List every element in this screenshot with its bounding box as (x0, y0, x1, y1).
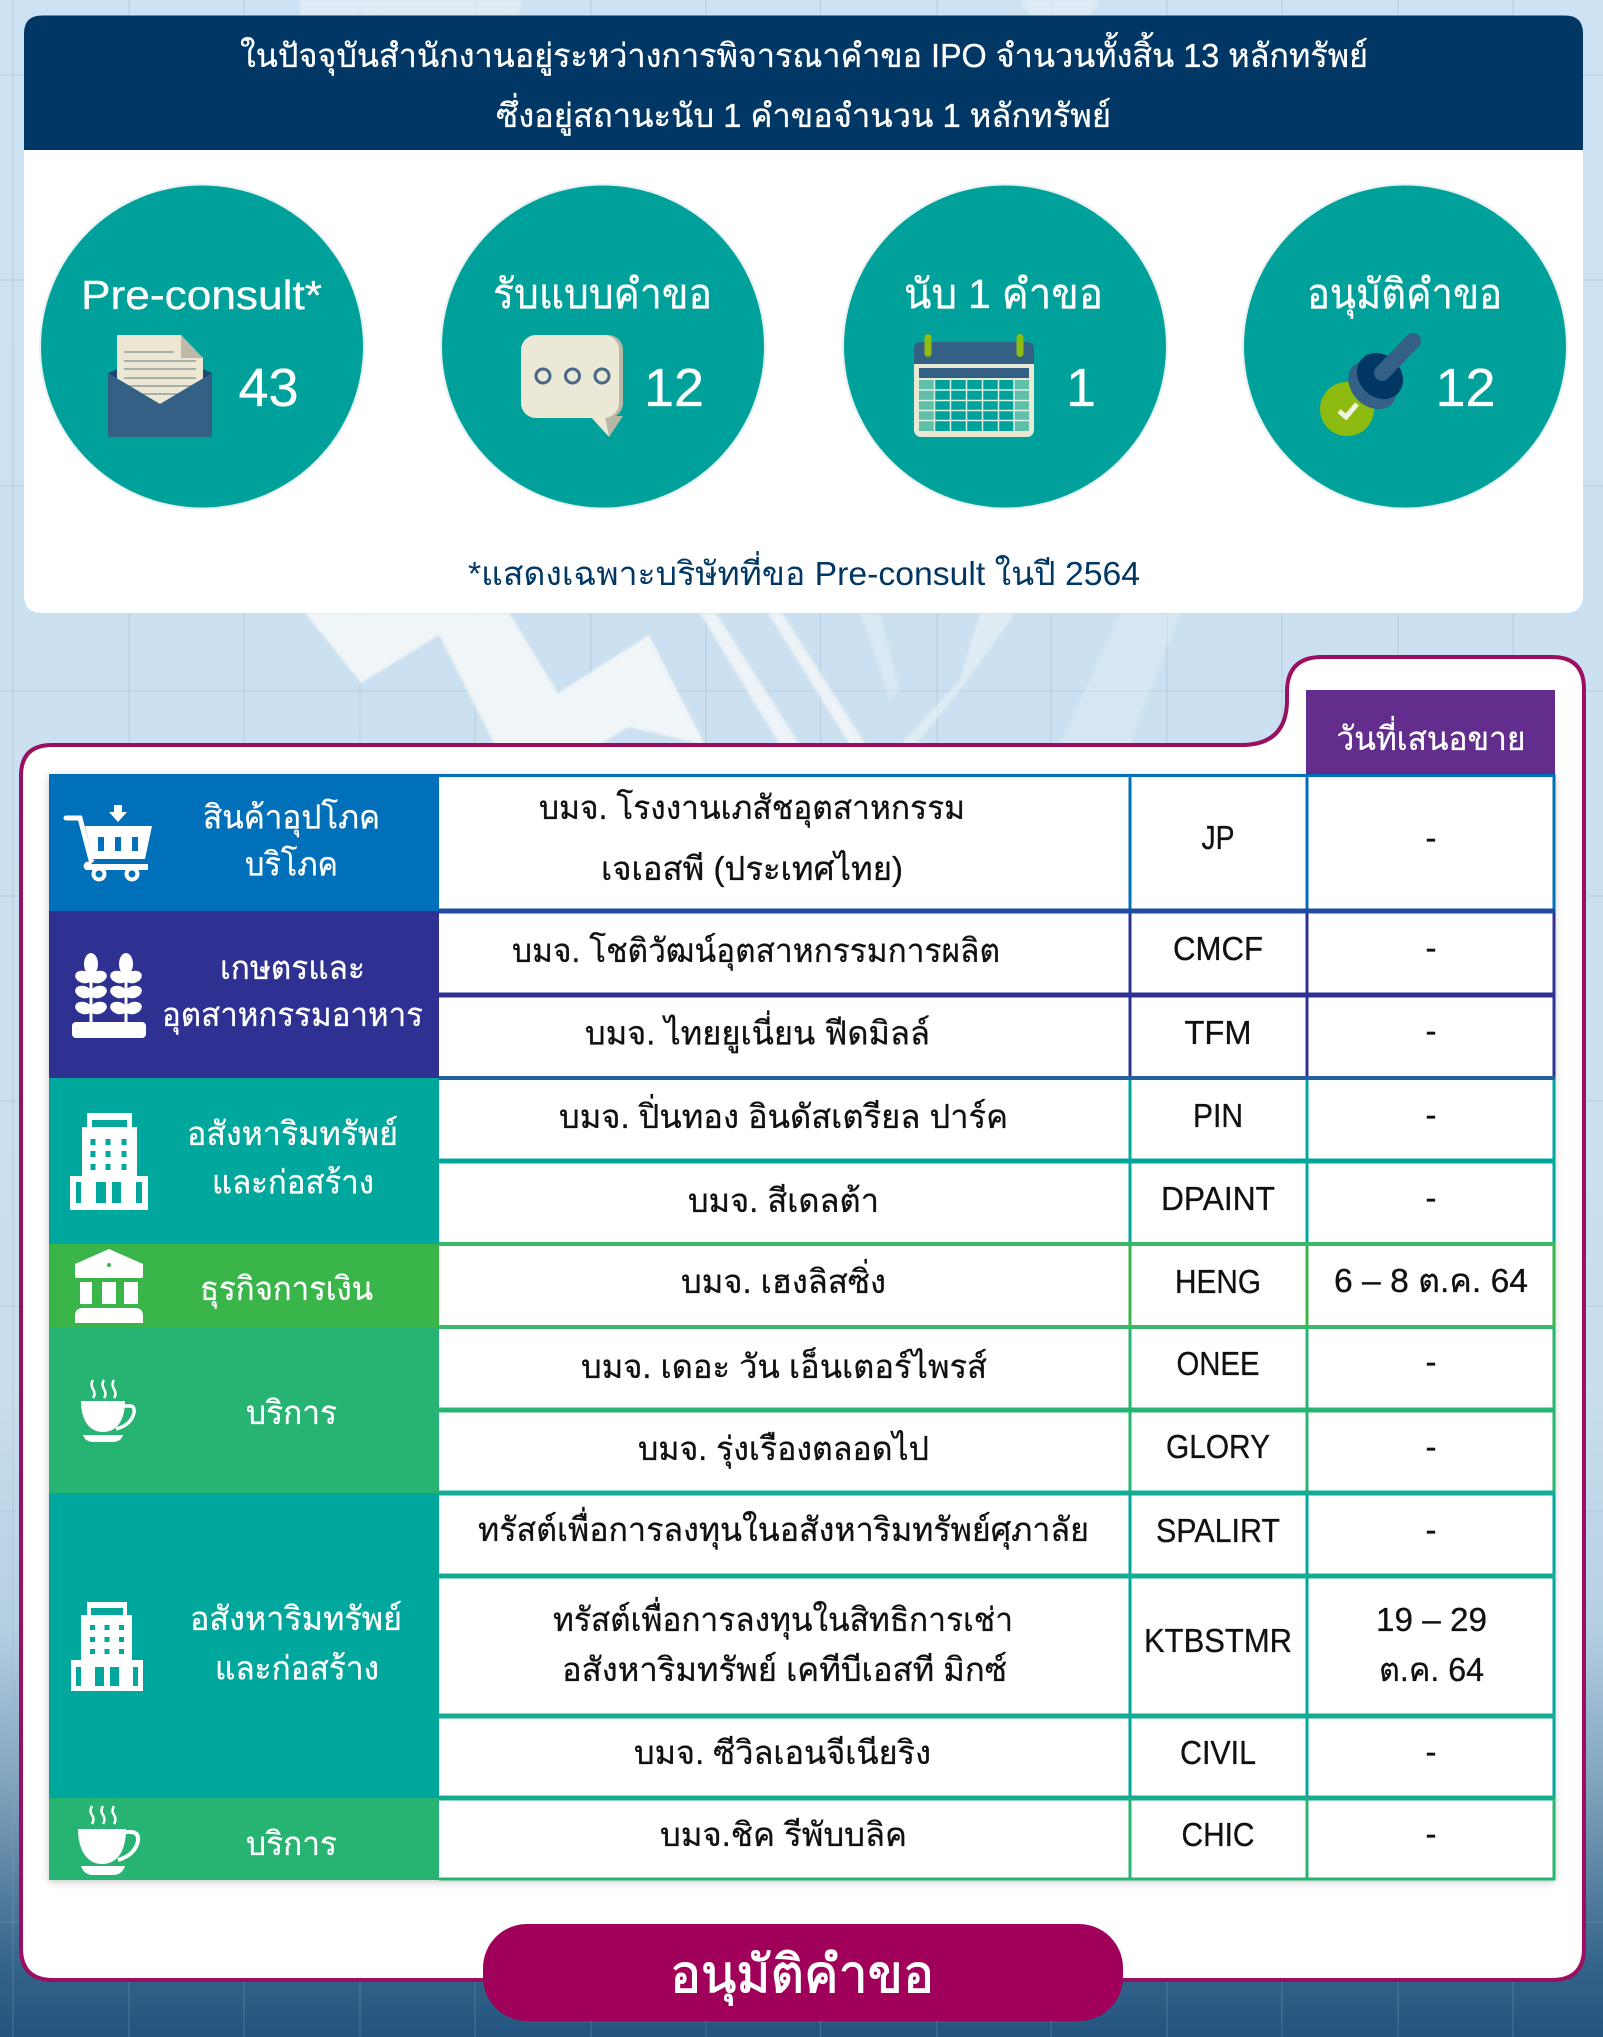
offer dates: - (1426, 819, 1436, 856)
category: services: บริการ (246, 1394, 337, 1431)
circle: Pre-consult: 43 (238, 358, 299, 418)
tickers: TFM (1184, 1014, 1252, 1051)
offer dates: - (1426, 1511, 1436, 1548)
offer dates: - (1426, 1428, 1436, 1465)
tickers: KTBSTMR (1144, 1622, 1292, 1659)
icon: shopping cart (66, 805, 152, 880)
footnote: *แสดงเฉพาะบริษัทที่ขอ Pre-consult ในปี 2564 (468, 551, 1140, 592)
category: property and construction: และก่อสร้าง (212, 1164, 374, 1200)
company names: ทรัสต์เพื่อการลงทุนในสิทธิการเช่า (553, 1597, 1013, 1640)
icon: coffee cup (78, 1806, 138, 1875)
offer dates: - (1426, 1179, 1436, 1216)
tickers (1144, 819, 1292, 1853)
tickers: CHIC (1182, 1816, 1254, 1853)
tickers: ONEE (1176, 1345, 1260, 1382)
offer dates: - (1426, 929, 1436, 966)
offer dates: - (1426, 1815, 1436, 1852)
icon: office building (71, 1602, 143, 1691)
category: property and construction (trusts): อสังหาริมทรัพย์ (190, 1600, 402, 1637)
circle: forms received (440, 184, 766, 510)
category: property and construction (49, 1078, 439, 1244)
tickers: GLORY (1166, 1428, 1270, 1465)
company names: บมจ. โชติวัฒน์อุตสาหกรรมการผลิต (512, 932, 1000, 971)
tickers: DPAINT (1161, 1180, 1275, 1217)
tickers: SPALIRT (1156, 1512, 1280, 1549)
company names: ทรัสต์เพื่อการลงทุนในอสังหาริมทรัพย์ศุภาลัย (478, 1507, 1089, 1550)
circle: Pre-consult: Pre-consult* (81, 272, 322, 318)
icon: bank (75, 1249, 143, 1323)
company names: บมจ. โรงงานเภสัชอุตสาหกรรม (539, 789, 965, 828)
grid lines (439, 774, 1555, 1880)
category: finance (49, 1244, 439, 1327)
category: consumer products (49, 774, 439, 911)
offer dates: - (1426, 1096, 1436, 1133)
icon: speech bubble (521, 335, 623, 437)
category: consumer products: บริโภค (245, 846, 338, 882)
circle: approved: อนุมัติคำขอ (1307, 271, 1502, 319)
tickers: CIVIL (1180, 1734, 1256, 1771)
category: property and construction (trusts): และก่อสร้าง (215, 1650, 379, 1686)
offer dates (1334, 819, 1528, 1852)
company names: บมจ. สีเดลต้า (688, 1182, 879, 1219)
icon: envelope with letter (108, 335, 212, 437)
offer dates: - (1426, 1012, 1436, 1049)
category: agriculture and food (49, 911, 439, 1078)
circle: filing count (842, 184, 1168, 510)
category: agriculture and food: เกษตรและ (220, 949, 365, 986)
header banner: ในปัจจุบันสำนักงานอยู่ระหว่างการพิจารณาคำขอ IPO จำนวนทั้งสิ้น 13 หลักทรัพย์ (240, 32, 1368, 76)
panel: approved list (21, 657, 1584, 2021)
company names (478, 789, 1089, 1853)
icon: calendar (914, 334, 1034, 437)
column heading: offer date: วันที่เสนอขาย (1336, 716, 1526, 757)
company names: บมจ. ซีวิลเอนจีเนียริง (634, 1734, 931, 1771)
badge: approved (483, 1924, 1123, 2021)
company names: บมจ. ปิ่นทอง อินดัสเตรียล ปาร์ค (559, 1094, 1008, 1135)
category: services (49, 1327, 439, 1493)
circle: approved (1242, 184, 1568, 510)
offer dates: - (1426, 1343, 1436, 1380)
offer dates: - (1426, 1733, 1436, 1770)
tickers: HENG (1175, 1263, 1261, 1300)
circle: filing count: นับ 1 คำขอ (904, 271, 1103, 317)
offer dates: 19 – 29 (1376, 1601, 1487, 1638)
tickers: PIN (1193, 1097, 1243, 1134)
circle: approved: 12 (1435, 358, 1496, 418)
icon: wheat plants (72, 953, 146, 1038)
tickers: CMCF (1173, 930, 1263, 967)
panel: IPO summary card (24, 16, 1583, 613)
company names: บมจ. เฮงลิสซิ่ง (681, 1259, 886, 1300)
circle: filing count: 1 (1066, 358, 1096, 418)
column heading: offer date (1306, 690, 1555, 774)
company names: เจเอสพี (ประเทศไทย) (601, 850, 903, 887)
category: property and construction (trusts) (49, 1493, 439, 1798)
table (49, 774, 1555, 1880)
circle: forms received: รับแบบคำขอ (493, 271, 712, 317)
circle: Pre-consult (39, 184, 365, 510)
offer dates: ต.ค. 64 (1379, 1651, 1484, 1688)
offer dates: 6 – 8 ต.ค. 64 (1334, 1262, 1528, 1299)
icon: stamp with check (1320, 341, 1413, 436)
company names: อสังหาริมทรัพย์ เคทีบีเอสที มิกซ์ (562, 1651, 1007, 1688)
badge: approved: อนุมัติคำขอ (670, 1946, 934, 2006)
icon: coffee cup (81, 1380, 134, 1442)
category: consumer products: สินค้าอุปโภค (203, 798, 380, 838)
category: services (second) (49, 1798, 439, 1880)
category: services (second): บริการ (246, 1825, 337, 1862)
company names: บมจ.ชิค รีพับบลิค (660, 1816, 907, 1853)
company names: บมจ. รุ่งเรืองตลอดไป (638, 1430, 929, 1469)
category: property and construction: อสังหาริมทรัพย์ (187, 1115, 398, 1152)
icon: office building (70, 1113, 148, 1210)
header banner (24, 16, 1583, 150)
tickers: JP (1202, 819, 1234, 856)
company names: บมจ. ไทยยูเนี่ยน ฟีดมิลล์ (585, 1010, 930, 1054)
category: agriculture and food: อุตสาหกรรมอาหาร (162, 996, 423, 1035)
header banner: ซึ่งอยู่สถานะนับ 1 คำขอจำนวน 1 หลักทรัพย์ (496, 93, 1111, 136)
circle: forms received: 12 (644, 358, 704, 418)
category: finance: ธุรกิจการเงิน (200, 1270, 373, 1309)
company names: บมจ. เดอะ วัน เอ็นเตอร์ไพรส์ (581, 1347, 987, 1385)
